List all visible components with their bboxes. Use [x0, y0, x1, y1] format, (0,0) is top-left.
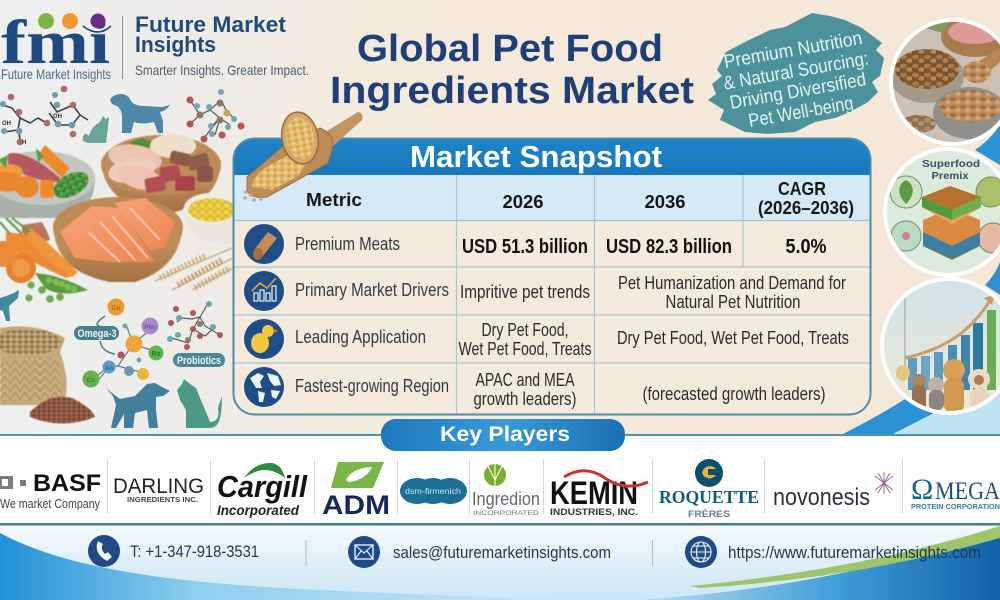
carrots and sweet potato	[0, 218, 78, 283]
row: Primary Market Drivers: Natural Pet Nutrition	[666, 292, 800, 312]
row: Leading Application: Dry Pet Food,	[482, 320, 568, 340]
heading pill: Key Players: Key Players	[440, 423, 570, 446]
grain sack	[0, 326, 95, 424]
callout: brush stroke tagline: Premium Nutrition	[722, 28, 864, 73]
row: Fastest-growing Region	[244, 367, 826, 409]
molecule: right top	[186, 89, 244, 142]
column headers: 2026	[502, 192, 544, 212]
logo: ADM: ADM	[322, 490, 390, 520]
row: Leading Application: Wet Pet Food, Treats	[458, 339, 592, 359]
icon: globe	[244, 367, 284, 407]
bowl of wet food	[933, 87, 1000, 139]
logo: Future Market Insights: Future Market Insights	[1, 66, 111, 82]
callout: brush stroke tagline: & Natural Sourcing:	[722, 48, 870, 95]
logo: Cargill: Incorporated	[217, 502, 299, 518]
illustration: nutrient diagram: Phn	[144, 325, 156, 331]
row: Primary Market Drivers	[244, 271, 846, 312]
illustration: nutrient diagram: Rs	[152, 351, 161, 358]
bowl of meat	[941, 22, 1000, 57]
logo: Future Market Insights: Insights	[135, 32, 216, 57]
contact: email: sales@futuremarketinsights.com	[393, 543, 611, 562]
title: Global Pet Food	[357, 28, 663, 70]
illustration: nutrient diagram: Cu	[111, 305, 121, 312]
bowl: salmon	[53, 197, 183, 282]
illustration: left molecules and pets: OH	[2, 121, 11, 127]
heading: Market Snapshot: Market Snapshot	[410, 139, 662, 174]
row: Fastest-growing Region: (forecasted growth leaders)	[642, 384, 826, 404]
table heading band	[233, 138, 871, 175]
molecule: sugar rings	[0, 102, 88, 142]
panel: key players logo strip	[0, 434, 1000, 526]
illustration: food bowls	[0, 134, 240, 424]
bowl: corn	[183, 193, 240, 243]
row: Premium Meats: Premium Meats	[295, 234, 400, 254]
fmi wordmark: fmi	[1, 9, 110, 77]
icon: wooden scoop of grain	[243, 109, 362, 202]
logo: dsm-firmenich	[400, 478, 467, 504]
logo: Future Market Insights: Smarter Insights. Greater Impact.	[135, 62, 309, 78]
title: Ingredients Market	[330, 70, 694, 112]
pea pod and peas	[25, 273, 88, 303]
title	[330, 28, 694, 112]
column headers: CAGR	[778, 179, 826, 199]
row: Primary Market Drivers: Pet Humanization and Demand for	[618, 273, 846, 293]
row: Premium Meats: 5.0%	[786, 236, 827, 258]
logo: dsm-firmenich: dsm-firmenich	[405, 487, 461, 496]
logo: Future Market Insights	[1, 9, 309, 82]
row: Leading Application: Leading Application	[295, 327, 426, 347]
row: Primary Market Drivers: Primary Market Drivers	[295, 280, 449, 300]
logo: Novonesis	[773, 472, 893, 511]
illustration: left molecules and pets	[0, 86, 244, 146]
illustration: nutrient diagram: An	[105, 366, 113, 372]
wheat	[155, 248, 233, 290]
row: Premium Meats	[244, 224, 827, 264]
photo: superfood premix	[883, 147, 1000, 277]
contact: email	[348, 536, 611, 568]
icon: cat silhouette	[83, 116, 109, 143]
illustration: left molecules and pets: H	[22, 140, 26, 146]
logo: Novonesis: novonesis	[773, 484, 870, 511]
label: Omega-3: Omega-3	[78, 328, 116, 340]
column headers	[306, 179, 854, 218]
column headers: (2026–2036)	[758, 198, 854, 218]
icon: dog silhouette	[110, 94, 170, 133]
icon: chick	[244, 319, 284, 359]
illustration: nutrient diagram	[0, 290, 225, 428]
contact: phone	[88, 535, 259, 567]
row: Leading Application	[244, 319, 849, 359]
logo: Kemin: INDUSTRIES, INC.	[550, 507, 638, 518]
logo: Darling Ingredients: INGREDIENTS INC.	[127, 497, 198, 504]
row: Premium Meats: USD 51.3 billion	[462, 236, 588, 258]
logo: Omega Protein: Ω	[911, 473, 933, 506]
logo: Omega Protein: PROTEIN CORPORATION	[911, 502, 1000, 511]
icon: cat left edge	[0, 290, 19, 321]
logo: Cargill	[217, 463, 308, 518]
logo: Ingredion	[472, 464, 540, 517]
table column header band	[233, 175, 871, 220]
wooden spoon	[978, 48, 1000, 70]
row: Fastest-growing Region: APAC and MEA	[476, 370, 574, 390]
logo: Ingredion: Ingredion	[472, 489, 540, 509]
pets	[896, 365, 910, 381]
row: Fastest-growing Region: growth leaders)	[474, 389, 576, 409]
icon: cat silhouette lower	[177, 379, 222, 428]
bowl: meat	[101, 134, 221, 212]
logo: Darling Ingredients: DARLING	[113, 475, 204, 498]
molecule: probiotics	[167, 301, 223, 350]
icon: growth chart	[244, 271, 284, 311]
photo: superfood premix: Premix	[932, 171, 969, 182]
photo: growth chart with pets	[880, 277, 1000, 417]
bowl of kibble	[890, 49, 964, 103]
callout: brush stroke tagline	[708, 13, 884, 134]
logo: Roquette: FRÈRES	[688, 509, 730, 520]
callout: brush stroke tagline: Pet Well-being	[747, 93, 855, 132]
icon: dog silhouette lower	[106, 383, 170, 428]
logo: Omega Protein	[911, 473, 1000, 511]
column headers: 2036	[644, 192, 686, 212]
illustration: left molecules and pets: OH	[53, 114, 62, 120]
blue swoosh behind photo circles	[843, 125, 1000, 434]
illustration: nutrient diagram: Cc	[87, 377, 96, 384]
logo: BASF: BASF	[33, 470, 101, 497]
logo: Roquette: ROQUETTE	[659, 487, 759, 507]
logo: Cargill: Cargill	[217, 469, 308, 504]
icon: meat roll	[244, 224, 284, 264]
row: Fastest-growing Region: Fastest-growing Region	[295, 376, 449, 396]
logo: Kemin: KEMIN	[550, 475, 638, 511]
callout: brush stroke tagline: Driving Diversified	[728, 69, 868, 114]
row: Premium Meats: USD 82.3 billion	[606, 236, 732, 258]
bowl: vegetables	[0, 145, 95, 218]
logo: ADM	[322, 462, 390, 520]
contact: website	[685, 536, 981, 568]
column headers: Metric	[306, 190, 362, 210]
logo: Future Market Insights: Future Market	[135, 12, 287, 37]
row: Leading Application: Dry Pet Food, Wet Pet Food, Treats	[617, 328, 849, 348]
panel: market snapshot table	[233, 138, 871, 415]
photo: superfood premix: Superfood	[922, 159, 980, 170]
label: Probiotics: Probiotics	[177, 355, 221, 367]
logo: Ingredion: INCORPORATED	[473, 511, 540, 517]
heading pill: Key Players	[381, 419, 625, 451]
logo: Roquette	[659, 459, 759, 520]
row: Primary Market Drivers: Impritive pet trends	[460, 282, 590, 302]
contact: phone: T: +1-347-918-3531	[130, 542, 259, 561]
footer	[0, 526, 1000, 600]
photo: pet food bowls	[889, 17, 1000, 146]
logo: BASF	[0, 470, 101, 511]
logo: BASF: We market Company	[0, 496, 100, 511]
